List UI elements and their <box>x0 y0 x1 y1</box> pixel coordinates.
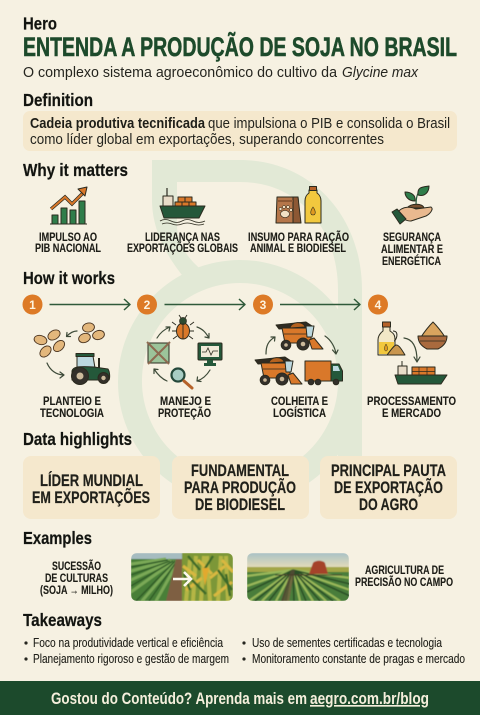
takeaway list right: Uso de sementes certificadas e tecnologia <box>252 636 442 650</box>
card: principal pauta: DE EXPORTAÇÃO <box>334 477 443 497</box>
takeaway list left <box>24 636 229 666</box>
label: sucessão de culturas <box>40 559 113 597</box>
step 2 badge <box>137 294 157 314</box>
icon: harvesters and truck <box>255 322 342 385</box>
step 3 badge <box>253 294 273 314</box>
card: fundamental: DE BIODIESEL <box>195 495 285 514</box>
arrow 3 to 4 <box>280 299 360 310</box>
footer <box>0 681 480 715</box>
label: colheita <box>271 394 328 420</box>
label: impulso <box>35 230 101 255</box>
takeaways heading: Takeaways <box>23 610 102 630</box>
takeaway list left: Planejamento rigoroso e gestão de margem <box>33 652 229 666</box>
card: líder mundial: LÍDER MUNDIAL <box>40 471 143 490</box>
label: liderança: EXPORTAÇÕES GLOBAIS <box>127 241 238 255</box>
label: impulso: PIB NACIONAL <box>35 241 101 255</box>
footer text: Gostou do Conteúdo? Aprenda mais em <box>51 690 307 708</box>
label: sucessão de culturas: SUCESSÃO <box>52 559 101 573</box>
icon: feed bag and oil bottle <box>276 186 321 223</box>
label: planteio: TECNOLOGIA <box>40 406 104 420</box>
arrow 1 to 2 <box>50 299 130 310</box>
icon: pest management cycle <box>147 315 222 388</box>
card: líder mundial <box>23 456 160 519</box>
icon: hand holding seedling <box>392 186 432 224</box>
panel: why it matters <box>23 160 443 268</box>
panel: data highlights <box>23 429 457 519</box>
why it matters heading: Why it matters <box>23 160 128 180</box>
label: processamento <box>367 394 456 420</box>
label: manejo <box>158 394 211 420</box>
card: fundamental: FUNDAMENTAL <box>191 461 289 480</box>
examples heading: Examples <box>23 528 92 548</box>
watermark logo <box>118 160 362 504</box>
label: manejo: PROTEÇÃO <box>158 406 211 420</box>
panel: definition <box>23 90 457 151</box>
label: agricultura de precisão <box>355 563 453 589</box>
step 1 badge <box>22 294 42 314</box>
label: insumo: INSUMO PARA RAÇÃO <box>248 230 349 244</box>
how it works heading: How it works <box>23 268 115 288</box>
step 4 badge: 4 <box>375 298 382 312</box>
panel: takeaways <box>23 610 465 666</box>
card: fundamental: PARA PRODUÇÃO <box>184 477 296 497</box>
panel: how it works <box>22 268 456 420</box>
label: liderança <box>127 230 238 255</box>
card: principal pauta: DO AGRO <box>359 495 418 514</box>
data highlights heading: Data highlights <box>23 429 132 449</box>
label: colheita: COLHEITA E <box>271 394 328 408</box>
label: insumo: ANIMAL E BIODIESEL <box>250 241 346 255</box>
panel: examples <box>23 528 453 601</box>
icon: growth chart <box>50 187 87 224</box>
definition text: como líder global em exportações, superando concorrentes <box>30 132 384 148</box>
photo: precision agriculture <box>247 553 350 601</box>
label: segurança: SEGURANÇA <box>383 230 441 244</box>
card: fundamental <box>172 456 309 519</box>
label: segurança: ALIMENTAR E <box>381 242 443 256</box>
photo: soy to corn <box>131 553 233 601</box>
icon: oil, meal and cargo ship <box>378 322 447 384</box>
label: sucessão de culturas: (SOJA → MILHO) <box>40 583 113 597</box>
label: planteio <box>40 394 104 420</box>
icon: cargo ship <box>160 188 205 225</box>
takeaway list left: Foco na produtividade vertical e eficiência <box>33 636 223 650</box>
label: planteio: PLANTEIO E <box>43 394 101 408</box>
definition text <box>30 116 450 148</box>
card: principal pauta: PRINCIPAL PAUTA <box>331 461 446 480</box>
footer text: aegro.com.br/blog <box>310 690 429 708</box>
label: sucessão de culturas: DE CULTURAS <box>45 571 108 585</box>
label: manejo: MANEJO E <box>160 394 211 408</box>
step 4 badge <box>368 294 388 314</box>
arrow 2 to 3 <box>164 299 245 310</box>
definition box <box>23 111 457 151</box>
step 2 badge: 2 <box>144 298 151 312</box>
label: segurança <box>381 230 443 268</box>
hero <box>23 14 457 81</box>
step 1 badge: 1 <box>29 298 36 312</box>
definition text: que impulsiona o PIB e consolida o Brasil <box>208 116 450 132</box>
hero label: Hero <box>23 14 57 34</box>
step 3 badge: 3 <box>260 298 267 312</box>
icon: soybeans and tractor <box>33 322 110 384</box>
label: segurança: ENERGÉTICA <box>382 254 441 268</box>
card: principal pauta <box>320 456 457 519</box>
label: colheita: LOGÍSTICA <box>273 406 326 420</box>
label: impulso: IMPULSO AO <box>39 230 97 244</box>
label: processamento: PROCESSAMENTO <box>367 394 456 408</box>
definition text: Cadeia produtiva tecnificada <box>30 116 206 132</box>
subtitle: Glycine max <box>342 64 418 81</box>
subtitle: O complexo sistema agroeconômico do cultivo da <box>23 64 338 81</box>
definition heading: Definition <box>23 90 93 110</box>
label: processamento: E MERCADO <box>382 406 441 420</box>
label: liderança: LIDERANÇA NAS <box>145 230 220 244</box>
footer bar <box>0 681 480 715</box>
label: agricultura de precisão: AGRICULTURA DE <box>365 563 444 577</box>
takeaway list right <box>242 636 465 666</box>
card: líder mundial: EM EXPORTAÇÕES <box>32 487 150 507</box>
label: insumo <box>248 230 349 255</box>
